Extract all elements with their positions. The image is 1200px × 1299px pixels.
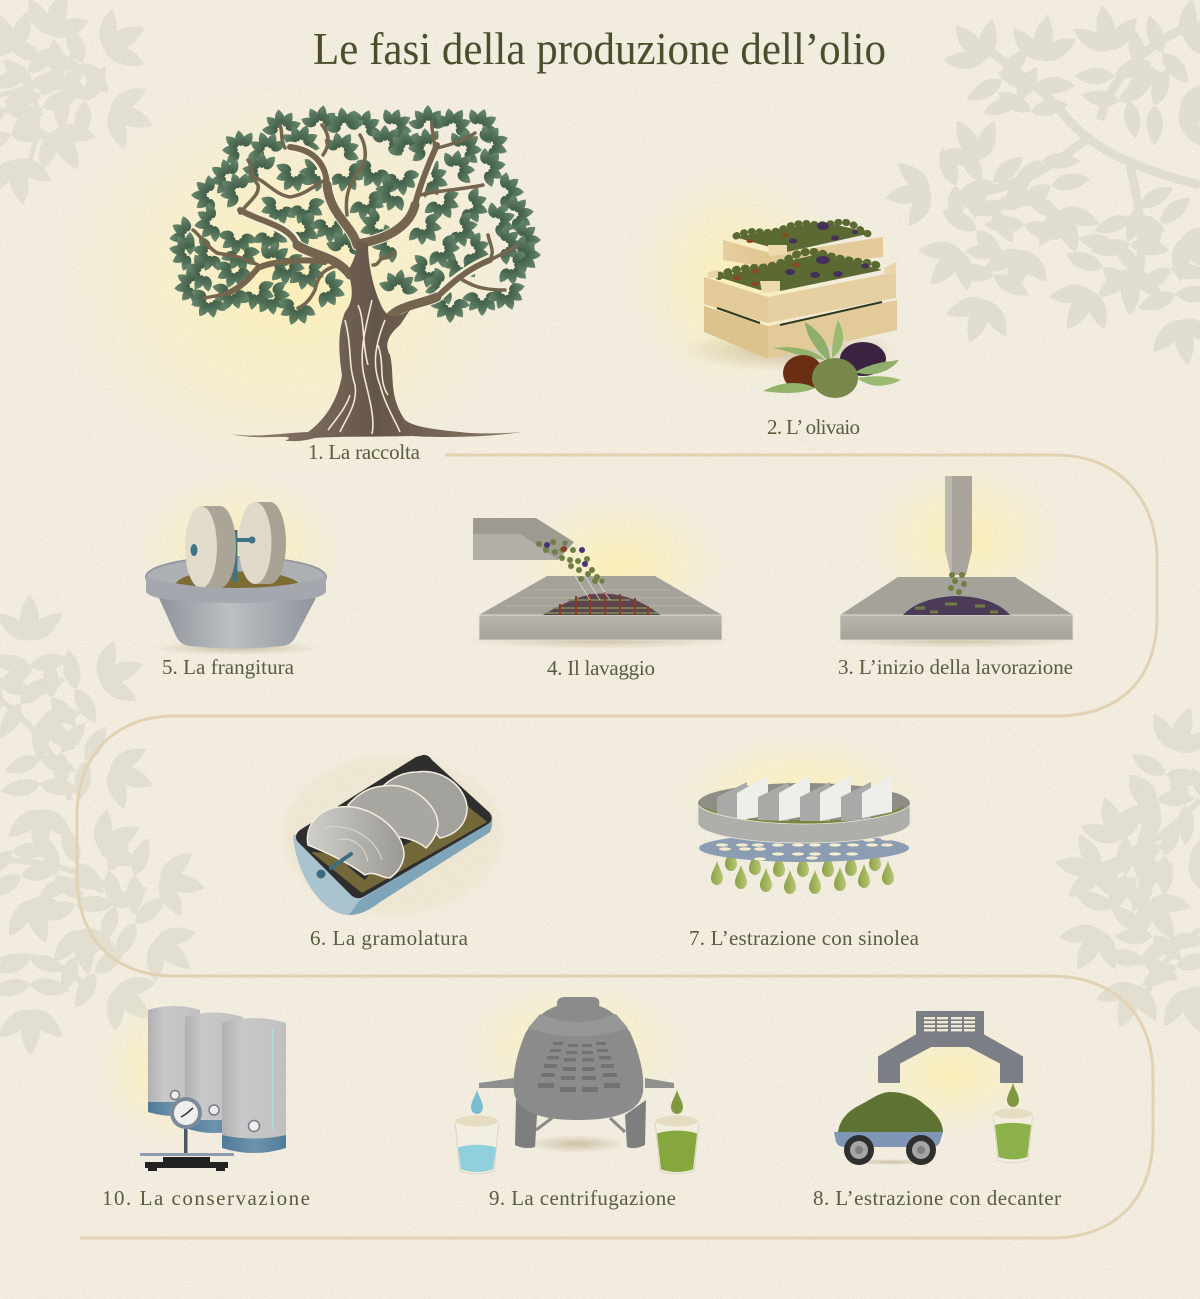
bolt	[316, 870, 326, 878]
step label 5: 5. La frangitura	[162, 655, 295, 679]
shaft	[331, 854, 351, 868]
step label 1: 1. La raccolta	[308, 440, 421, 464]
olive paste heap	[838, 1092, 943, 1132]
millstones	[185, 502, 286, 588]
olive paste	[175, 572, 300, 588]
lower crate	[704, 252, 897, 359]
step label 7: 7. L’estrazione con sinolea	[689, 926, 920, 950]
tree trunk	[230, 240, 522, 441]
falling olives	[536, 539, 605, 584]
illustration: millstones in basin	[146, 502, 326, 655]
tray inner lines	[505, 590, 705, 606]
basin body	[159, 598, 316, 648]
illustration: malaxer	[283, 755, 503, 915]
drops back row	[725, 847, 881, 877]
front tank	[222, 1018, 286, 1153]
dark interior	[296, 755, 492, 898]
basin shadow	[151, 641, 321, 655]
basin rim	[146, 577, 326, 603]
oil drop	[1007, 1083, 1019, 1107]
back tank	[148, 1006, 200, 1116]
vent slats	[538, 1042, 620, 1092]
ring band	[698, 805, 910, 843]
body	[514, 997, 643, 1120]
tree branches	[193, 122, 518, 325]
illustration: storage tanks and scale	[140, 1006, 286, 1171]
tray top	[840, 577, 1073, 615]
illustration: olive tree	[166, 100, 541, 441]
tube	[945, 476, 972, 575]
tray front	[479, 615, 722, 640]
step label 6: 6. La gramolatura	[310, 926, 469, 950]
scale	[140, 1097, 234, 1171]
vents	[924, 1017, 975, 1031]
crate shadow	[680, 328, 900, 372]
left cup with water	[455, 1115, 499, 1174]
cup with oil	[993, 1108, 1033, 1163]
olive paste	[311, 802, 487, 893]
water streams	[565, 560, 610, 600]
perforated plate	[699, 834, 909, 862]
middle tank	[185, 1012, 243, 1133]
washed olive pile	[543, 594, 660, 615]
ring interior	[698, 783, 910, 823]
illustration: washing tray and hopper	[465, 518, 735, 649]
plate holes	[716, 837, 893, 861]
background olive branch: top left	[0, 0, 167, 212]
screw discs	[307, 772, 467, 878]
olives with leaves	[763, 312, 901, 398]
upper crate	[723, 222, 883, 268]
step label 8: 8. L’estrazione con decanter	[813, 1186, 1061, 1210]
screw hub rings	[325, 827, 382, 862]
right cup with oil	[655, 1115, 699, 1174]
background olive tree: left	[0, 594, 216, 1056]
illustration: start of processing	[831, 476, 1081, 648]
background olive tree: top right	[878, 0, 1200, 372]
yellow glows behind illustrations	[50, 80, 1065, 1145]
illustration: centrifuge	[455, 997, 699, 1174]
step label 4: 4. Il lavaggio	[547, 656, 655, 680]
background olive tree: right	[1042, 693, 1200, 1047]
arms	[479, 1078, 674, 1088]
title: Le fasi della produzione dell’olio	[313, 23, 886, 74]
hopper	[473, 518, 574, 560]
step label 3: 3. L’inizio della lavorazione	[838, 655, 1073, 679]
floor shadow	[527, 1135, 627, 1153]
step label 10: 10. La conservazione	[102, 1186, 310, 1210]
malaxer warm shadow	[283, 755, 503, 915]
cart wheels	[844, 1135, 936, 1165]
decanter arch	[879, 1012, 1022, 1082]
tray top	[479, 576, 722, 615]
connector path between steps	[77, 455, 1157, 1238]
step label 9: 9. La centrifugazione	[489, 1186, 676, 1210]
tray shadow	[465, 631, 735, 649]
cart	[834, 1132, 943, 1147]
blades	[717, 775, 892, 821]
step label 2: 2. L’ olivaio	[767, 415, 860, 439]
olive colour flecks in crates	[733, 222, 869, 286]
illustration: crates of olives	[680, 222, 901, 398]
tray shadow	[831, 632, 1081, 648]
olive pile	[903, 596, 1010, 615]
legs	[515, 1100, 646, 1148]
tree leaves	[166, 100, 541, 332]
basin interior	[146, 557, 326, 597]
trunk bark lines	[328, 300, 400, 434]
blue tank	[293, 815, 492, 915]
oil drop	[671, 1090, 683, 1114]
illustration: decanter extraction	[834, 1012, 1033, 1165]
falling olives	[948, 572, 967, 595]
water drop	[471, 1090, 483, 1114]
olive paste in ring	[702, 805, 905, 825]
illustration: sinolea extraction	[698, 775, 910, 894]
tray front	[840, 615, 1073, 640]
drops front row	[711, 861, 894, 894]
